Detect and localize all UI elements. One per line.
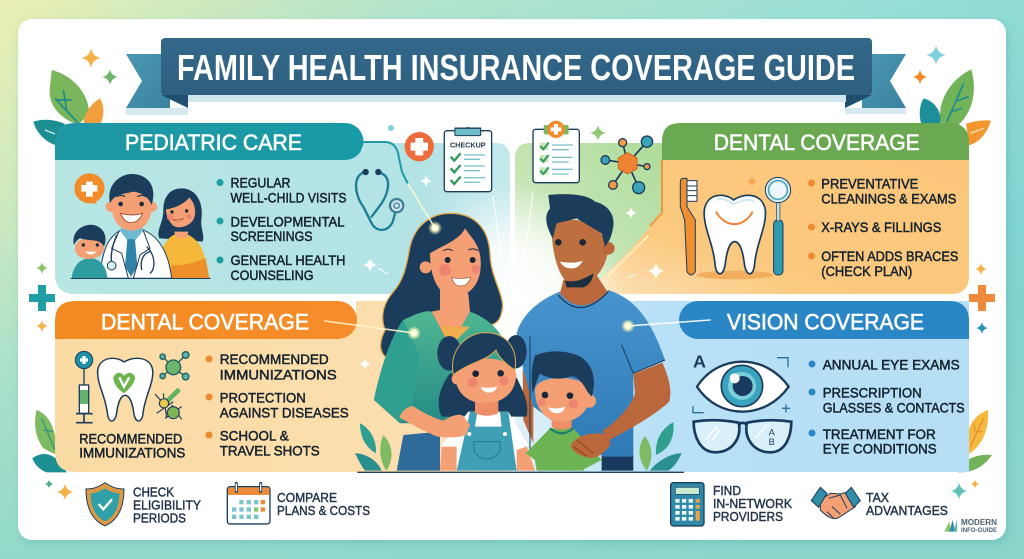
icon caption <box>79 430 185 461</box>
icon: checkup clipboard <box>444 127 492 192</box>
panel: pediatric care background <box>55 143 510 294</box>
title ribbon tails <box>126 54 906 115</box>
icon: doctor with family <box>71 173 211 279</box>
heading bar <box>55 123 364 160</box>
heading bar <box>679 301 969 339</box>
plants at family's feet <box>355 422 682 471</box>
woman <box>158 188 209 278</box>
bullet list <box>206 351 349 459</box>
footer: in-network providers <box>671 483 792 526</box>
boy <box>526 351 611 471</box>
bullet list: SCHOOL & <box>220 428 289 444</box>
icon: molecule <box>601 136 653 194</box>
icon: calculator <box>671 483 704 526</box>
germs <box>155 389 182 419</box>
child <box>72 225 107 278</box>
panel: pediatric care <box>55 123 408 283</box>
label <box>713 483 792 524</box>
bullet list: EYE CONDITIONS <box>823 441 937 457</box>
label: PERIODS <box>133 510 186 525</box>
girl <box>399 333 535 471</box>
bullet list <box>808 175 958 279</box>
icon: shield <box>86 483 124 526</box>
syringe <box>75 351 93 423</box>
label: PLANS & COSTS <box>277 503 370 518</box>
footer: compare plans <box>227 483 370 524</box>
bullet list: X-RAYS & FILLINGS <box>821 219 941 235</box>
mirror <box>765 177 791 275</box>
panel: dental coverage body <box>585 150 969 294</box>
bullet list: RECOMMENDED <box>220 351 329 367</box>
bullet list: PRESCRIPTION <box>823 385 922 401</box>
decorative leaves, lower left <box>32 410 67 472</box>
baseline <box>357 472 684 473</box>
panel: immunization coverage <box>55 301 357 461</box>
label: PROVIDERS <box>713 509 783 524</box>
light rays and glow points <box>325 184 710 340</box>
icon: handshake <box>811 487 860 519</box>
footer: tax advantages <box>811 487 948 519</box>
heading bar <box>662 123 969 160</box>
heading: PEDIATRIC CARE <box>125 130 302 155</box>
label: ELIGIBILITY <box>133 497 201 512</box>
icon: green clipboard <box>533 121 579 183</box>
bullet list <box>808 356 965 457</box>
bullet list: GLASSES & CONTACTS <box>823 400 965 416</box>
icon caption: RECOMMENDED <box>79 430 182 446</box>
speech badge <box>74 173 105 204</box>
watermark logo <box>944 518 998 534</box>
label: CHECKUP <box>450 141 486 150</box>
label: FIND <box>713 483 741 498</box>
chamfer stroke <box>650 160 662 226</box>
logo mark <box>944 520 957 532</box>
bullet list: WELL-CHILD VISITS <box>230 190 346 206</box>
icon: calendar <box>227 483 270 524</box>
glasses <box>694 420 791 452</box>
tooth <box>704 195 765 274</box>
centre glow <box>397 183 627 413</box>
bullet list: AGAINST DISEASES <box>220 404 349 420</box>
eye <box>697 362 789 412</box>
heading: DENTAL COVERAGE <box>101 309 309 334</box>
logo text: INFO-GUIDE <box>961 527 998 534</box>
panel: vision coverage <box>679 301 969 457</box>
doctor <box>100 174 172 278</box>
glasses: A <box>769 428 776 438</box>
logo text <box>961 518 998 534</box>
label: COMPARE <box>277 490 337 505</box>
bullet list: PREVENTATIVE <box>821 175 918 191</box>
label <box>866 490 948 518</box>
decorative leaves, top right <box>920 69 991 145</box>
mother <box>374 213 503 471</box>
decorative sparkles and plus signs <box>29 45 995 500</box>
glasses: B <box>769 437 775 447</box>
bullet list: IMMUNIZATIONS <box>220 366 337 382</box>
bullet list: PROTECTION <box>220 390 306 406</box>
mother's forearm and hand <box>399 406 470 437</box>
icon: toothbrush, tooth and mirror <box>680 176 791 279</box>
tooth <box>98 358 153 421</box>
label: TAX <box>866 490 889 505</box>
family illustration <box>357 194 684 473</box>
decorative leaves, lower right <box>958 410 992 472</box>
icon: eye and glasses <box>693 352 791 452</box>
bullet list: REGULAR <box>230 175 290 191</box>
logo text: MODERN <box>961 518 997 527</box>
label: IN-NETWORK <box>713 496 792 511</box>
toothbrush <box>680 178 697 275</box>
icon: syringe, tooth and germs <box>75 351 189 423</box>
heading bar <box>55 301 357 339</box>
title: FAMILY HEALTH INSURANCE COVERAGE GUIDE <box>177 47 855 88</box>
decorative leaves, top left <box>33 70 103 146</box>
label <box>277 490 370 518</box>
father's hand <box>571 433 611 458</box>
heading: VISION COVERAGE <box>727 309 924 334</box>
bullet list: DEVELOPMENTAL <box>230 213 345 229</box>
father <box>517 194 670 471</box>
bullet list: TRAVEL SHOTS <box>220 443 320 459</box>
connector line <box>363 142 408 184</box>
panel: dental coverage <box>650 123 969 279</box>
bullet list: TREATMENT FOR <box>823 426 936 442</box>
bullet list: SCREENINGS <box>230 228 312 244</box>
title banner <box>161 38 872 95</box>
footer: check eligibility <box>86 483 201 526</box>
bullet list: COUNSELING <box>230 267 314 283</box>
bullet list <box>216 175 346 283</box>
bullet list: ANNUAL EYE EXAMS <box>823 356 960 372</box>
panel: upper centre green background <box>515 143 662 294</box>
label: CHECK <box>133 485 174 500</box>
label <box>133 485 201 525</box>
icon: stethoscope <box>356 170 403 230</box>
molecule <box>160 352 189 380</box>
icon caption: IMMUNIZATIONS <box>79 445 185 461</box>
bullet list: GENERAL HEALTH <box>230 252 346 268</box>
panel: immunization body <box>55 301 512 472</box>
icon: orange plus badge <box>388 125 434 161</box>
heading: DENTAL COVERAGE <box>714 130 920 155</box>
bullet list: (CHECK PLAN) <box>821 263 912 279</box>
panel: vision body <box>515 301 969 472</box>
label: ADVANTAGES <box>866 503 948 518</box>
bullet list: CLEANINGS & EXAMS <box>821 190 956 206</box>
bullet list: OFTEN ADDS BRACES <box>821 248 958 264</box>
eye chart letter: A <box>693 352 706 372</box>
